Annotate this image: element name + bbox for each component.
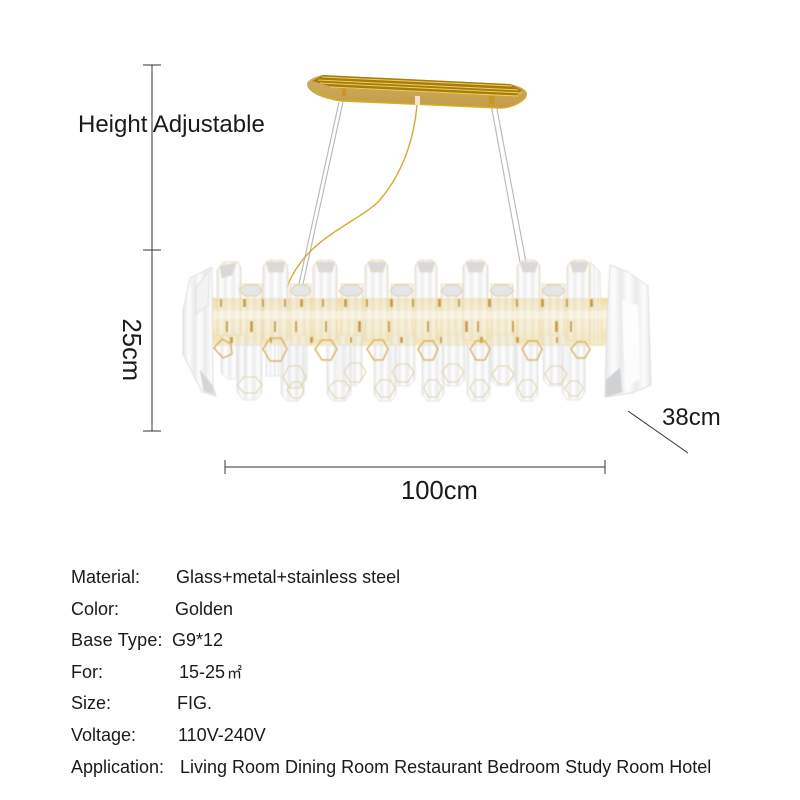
crystal ring: lower short crystals <box>221 335 567 386</box>
crystal ring: golden central band <box>206 298 608 346</box>
crystal ring: left end crystals <box>183 268 216 396</box>
crystal ring: tall lower crystals <box>237 345 585 401</box>
spec: for <box>71 662 242 682</box>
spec: for: 15-25㎡ <box>179 662 242 682</box>
label: height adjustable: Height Adjustable <box>78 111 265 138</box>
spec: voltage: Voltage: <box>71 725 136 745</box>
spec: color: Color: <box>71 599 119 619</box>
label: 100cm width: 100cm <box>401 477 478 505</box>
crystal ring: upper short crystals <box>239 262 602 345</box>
label: 38cm depth: 38cm <box>662 404 721 431</box>
spec: voltage: 110V-240V <box>178 725 266 745</box>
spec: for: For: <box>71 662 103 682</box>
spec: application: Living Room Dining Room Restaurant Bedroom Study Room Hotel <box>180 757 711 777</box>
dimension: depth line <box>628 411 688 453</box>
spec: color <box>71 599 233 619</box>
spec: color: Golden <box>175 599 233 619</box>
crystal ring <box>183 260 651 401</box>
label: 25cm height: 25cm <box>117 318 145 381</box>
dimension: vertical height line <box>143 65 161 431</box>
crystal ring: right end crystals <box>605 265 651 397</box>
crystal ring: short crystal top facets <box>239 285 565 296</box>
spec: size <box>71 693 212 713</box>
spec: material: Glass+metal+stainless steel <box>176 567 400 587</box>
spec: application: Application: <box>71 757 164 777</box>
crystal ring: tall upper crystals <box>217 260 590 340</box>
crystal ring: hexagonal crystal ends <box>237 363 583 398</box>
dimension: width line <box>225 460 605 474</box>
spec: base type: G9*12 <box>172 630 223 650</box>
suspension cables and power cord <box>287 102 526 287</box>
spec: size: FIG. <box>177 693 212 713</box>
crystal ring: warm gold reflections on band <box>206 298 608 346</box>
ceiling plate <box>307 75 527 108</box>
spec: voltage <box>71 725 266 745</box>
spec: base type <box>71 630 223 650</box>
spec: material <box>71 567 400 587</box>
spec: material: Material: <box>71 567 140 587</box>
spec: base type: Base Type: <box>71 630 163 650</box>
spec: size: Size: <box>71 693 111 713</box>
crystal ring: gold hexagon rings on band <box>214 338 590 361</box>
